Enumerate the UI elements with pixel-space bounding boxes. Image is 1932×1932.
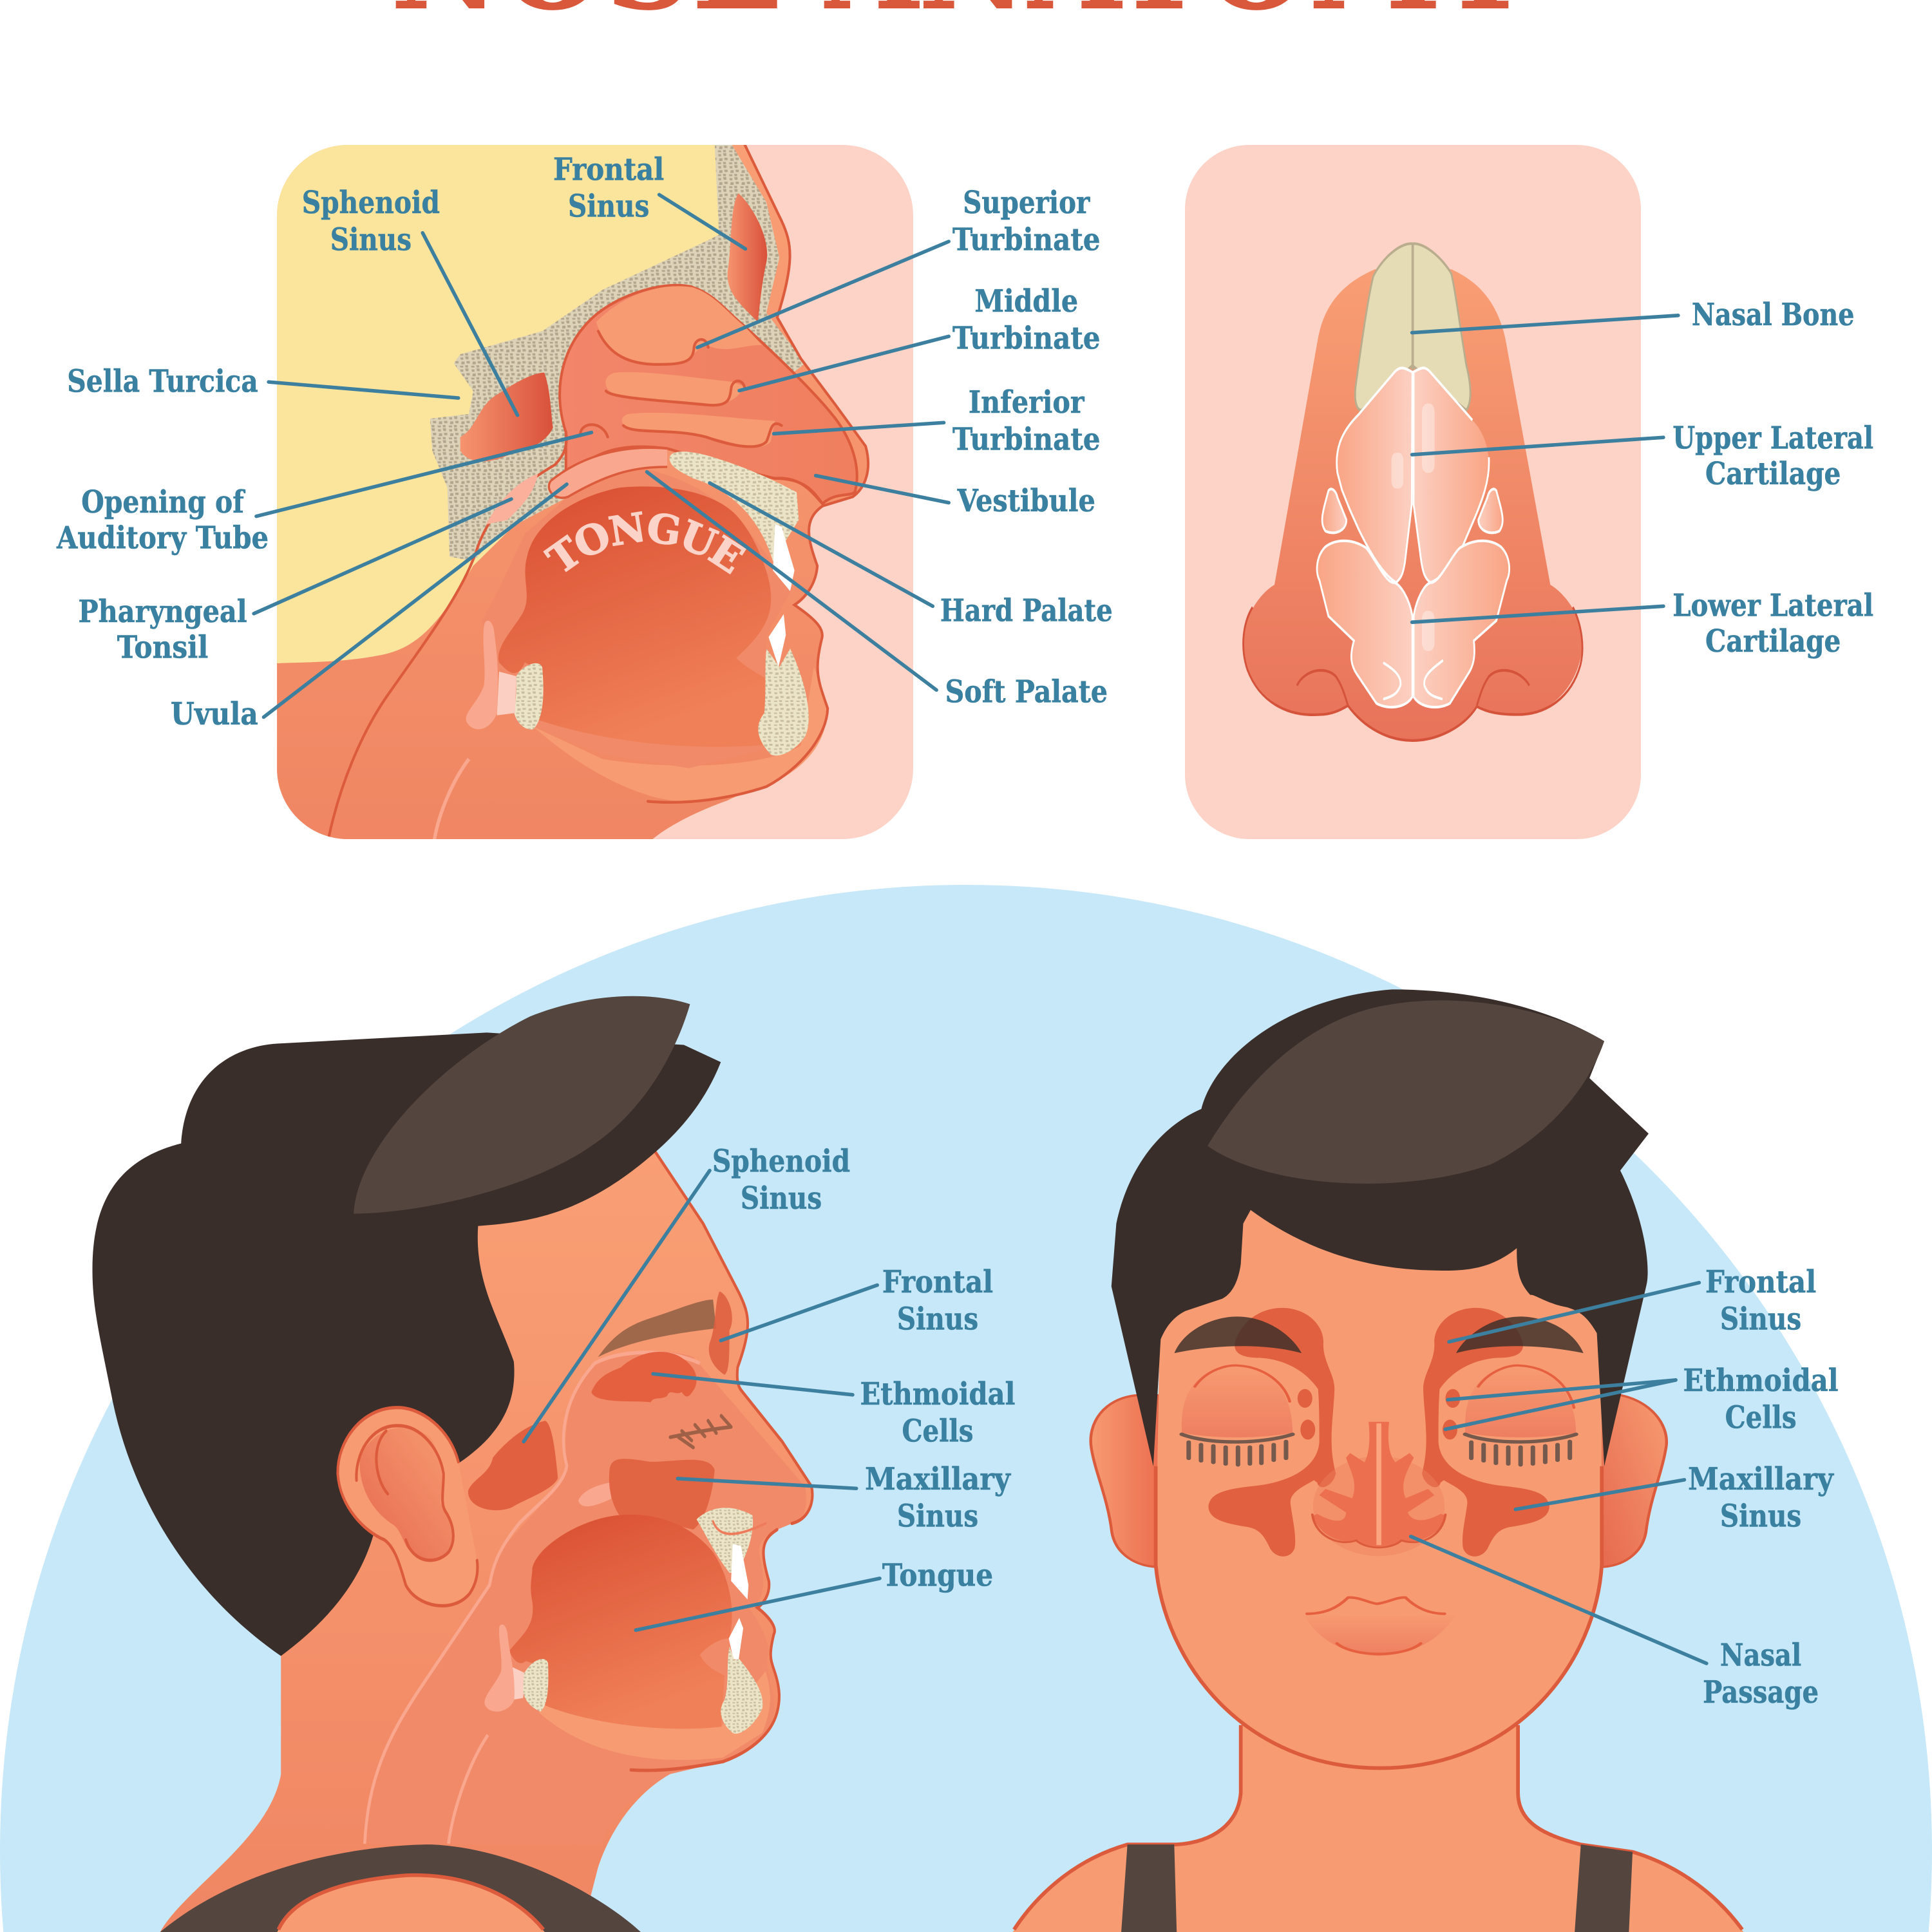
label: Inferior Turbinate: [774, 384, 1101, 457]
label: Ethmoidal Cells (side view): Cells: [902, 1414, 973, 1450]
label: Pharyngeal Tonsil: [78, 499, 511, 666]
chin outline: [1156, 1466, 1602, 1768]
label: Superior Turbinate: [697, 185, 1101, 348]
label: Middle Turbinate: [739, 283, 1101, 391]
eyelid arcs: [1195, 1365, 1574, 1408]
label: Sphenoid Sinus (side view): [524, 1144, 850, 1442]
hard palate: [669, 451, 799, 561]
face: [1156, 1208, 1602, 1768]
label: Opening of Auditory Tube: Auditory Tube: [56, 520, 269, 556]
right ear: [1601, 1396, 1667, 1567]
label: Middle Turbinate: Middle: [974, 283, 1078, 319]
label: Maxillary Sinus (front view): Maxillary: [1688, 1461, 1834, 1497]
labels and leader lines: [56, 151, 1873, 1710]
soft palate band: [578, 1482, 611, 1506]
lips: [1303, 1614, 1457, 1656]
illustration: front view of head: [1013, 989, 1743, 1932]
lip line: [713, 1521, 766, 1534]
eyelid left: [1182, 1365, 1293, 1437]
label: Vestibule: [816, 476, 1095, 519]
neck and shoulders: [1013, 1725, 1743, 1932]
neckline outline: [278, 1875, 544, 1929]
label: Soft Palate: Soft Palate: [945, 674, 1108, 710]
label: Tongue: [636, 1557, 993, 1630]
label: Maxillary Sinus (front view): Sinus: [1720, 1499, 1801, 1535]
label: Frontal Sinus (front view): Sinus: [1720, 1301, 1801, 1337]
label: Frontal Sinus (side view): [721, 1264, 993, 1341]
label: Inferior Turbinate: Turbinate: [952, 421, 1101, 457]
hard palate: [697, 1508, 753, 1573]
right sinus group: [1422, 1308, 1549, 1557]
ethmoidal cells: [591, 1352, 697, 1402]
label: Inferior Turbinate: Inferior: [969, 384, 1084, 421]
label: Maxillary Sinus (side view): Sinus: [897, 1499, 978, 1535]
teeth: [729, 1544, 748, 1660]
label: Maxillary Sinus (side view): [677, 1461, 1011, 1535]
face profile outline: [648, 145, 868, 802]
turbinate outlines: [580, 331, 822, 504]
lower lateral cartilage right: [1414, 541, 1510, 707]
tongue: [498, 486, 771, 747]
nose tip: [1313, 1456, 1444, 1556]
chin bone: [721, 1647, 762, 1734]
nasal passage: [1313, 1422, 1446, 1546]
brain background: [277, 145, 721, 663]
label: Sphenoid Sinus (section): [302, 185, 518, 415]
neckline skin: [277, 1875, 545, 1932]
hyoid link: [511, 1667, 526, 1700]
epiglottis: [466, 621, 498, 729]
lower lateral cartilage left: [1317, 541, 1412, 707]
oral area: [482, 469, 792, 768]
label: Opening of Auditory Tube: [56, 433, 591, 556]
inferior turbinate: [622, 413, 775, 447]
label: Pharyngeal Tonsil: Tonsil: [117, 630, 208, 666]
nasal bone: [1355, 243, 1470, 410]
label: Soft Palate: [647, 472, 1108, 710]
label: Lower Lateral Cartilage: Lower Lateral: [1672, 588, 1873, 624]
eyebrow: [598, 1300, 716, 1357]
hair highlight: [354, 996, 690, 1214]
label: Pharyngeal Tonsil: Pharyngeal: [78, 594, 247, 630]
bone suture: [1410, 245, 1416, 370]
pharyngeal tonsil: [486, 474, 538, 524]
label: Uvula: [171, 484, 567, 732]
label: Lower Lateral Cartilage: Cartilage: [1705, 623, 1841, 659]
accessory cartilage right: [1479, 489, 1502, 533]
label: Superior Turbinate: Turbinate: [952, 222, 1101, 258]
label: Frontal Sinus (section): [553, 151, 746, 249]
label: Frontal Sinus (front view): [1449, 1264, 1816, 1342]
label: Sphenoid Sinus (side view): Sinus: [741, 1180, 822, 1217]
neck line: [448, 1735, 488, 1844]
label: Hard Palate: Hard Palate: [940, 592, 1113, 629]
neck and face skin: [277, 145, 868, 840]
tongue: [509, 1515, 732, 1728]
label: Frontal Sinus (section): Sinus: [568, 189, 649, 225]
panel: front view of nasal cartilage: [1185, 145, 1641, 839]
label: Upper Lateral Cartilage: Upper Lateral: [1672, 420, 1873, 456]
label: Frontal Sinus (front view): Frontal: [1705, 1264, 1816, 1300]
label: Middle Turbinate: Turbinate: [952, 320, 1101, 356]
label: Tongue: Tongue: [882, 1557, 993, 1593]
shirt straps: [1121, 1844, 1633, 1932]
label: Frontal Sinus (section): Frontal: [553, 151, 664, 187]
label: Ethmoidal Cells (front view): [1445, 1363, 1839, 1435]
label: Sphenoid Sinus (section): Sinus: [330, 222, 412, 258]
eyebrows: [1174, 1316, 1584, 1353]
upper lateral cartilage right: [1413, 368, 1489, 583]
hair highlight: [1208, 1000, 1604, 1184]
jaw light band: [534, 667, 828, 801]
teeth: [768, 524, 795, 667]
soft palate outline: [549, 448, 667, 498]
frontal sinus: [728, 193, 767, 322]
curved label: tongue: TONGUE: [543, 511, 746, 574]
label: Superior Turbinate: Superior: [963, 185, 1090, 221]
superior turbinate: [596, 286, 762, 366]
nose outline: [1244, 607, 1582, 741]
label: Ethmoidal Cells (front view): Ethmoidal: [1683, 1363, 1839, 1399]
label: Vestibule: Vestibule: [957, 483, 1095, 519]
chin light area: [539, 1671, 770, 1760]
label: Sella Turcica: [67, 363, 459, 399]
ear lines: [356, 1426, 453, 1560]
shirt: [160, 1844, 641, 1932]
inner ear: [359, 1428, 453, 1560]
middle turbinate: [605, 372, 745, 405]
label: Nasal Passage: Passage: [1703, 1674, 1819, 1710]
face profile outline: [631, 1152, 812, 1770]
label: Sphenoid Sinus (section): Sphenoid: [302, 185, 440, 221]
epiglottis: [484, 1625, 515, 1712]
label: Sella Turcica: Sella Turcica: [67, 363, 258, 399]
interior outline: [365, 1352, 700, 1844]
lip lines: [1307, 1598, 1444, 1654]
jaw bone: [758, 649, 809, 755]
hair: [1112, 989, 1649, 1466]
nostril outline: [1312, 1515, 1445, 1548]
eyelashes: [670, 1416, 731, 1448]
label: Nasal Bone: Nasal Bone: [1692, 297, 1854, 333]
label: Lower Lateral Cartilage: [1412, 588, 1873, 659]
eyelashes: [1182, 1434, 1576, 1465]
label: Upper Lateral Cartilage: [1412, 420, 1873, 492]
left sinus group: [1208, 1308, 1336, 1557]
label: Ethmoidal Cells (side view): Ethmoidal: [860, 1376, 1016, 1412]
neck outline: [1014, 1725, 1742, 1929]
label: Nasal Bone: [1412, 297, 1854, 333]
upper lateral cartilage left: [1337, 368, 1412, 583]
neck line: [435, 759, 469, 840]
sphenoid sinus: [460, 373, 553, 462]
pharynx back wall: [328, 432, 567, 837]
label: Hard Palate: [710, 483, 1113, 629]
alar curls: [1384, 661, 1443, 699]
illustration: side view of head: [92, 996, 812, 1932]
label: Ethmoidal Cells (side view): [653, 1374, 1016, 1450]
sphenoid sinus: [468, 1421, 558, 1510]
right cartilage outline: [1413, 368, 1489, 583]
face interior: [365, 1351, 806, 1844]
external nose: [1243, 269, 1583, 741]
soft palate: [549, 448, 667, 498]
hair: [92, 1032, 721, 1656]
ear: [337, 1408, 478, 1605]
label: Sphenoid Sinus (side view): Sphenoid: [712, 1144, 850, 1180]
label: Nasal Passage: [1411, 1537, 1819, 1710]
label: Uvula: Uvula: [171, 696, 258, 732]
accessory cartilage left: [1322, 489, 1347, 533]
label: Maxillary Sinus (front view): [1515, 1461, 1834, 1535]
label: Frontal Sinus (side view): Sinus: [897, 1301, 978, 1337]
label: Nasal Passage: Nasal: [1720, 1638, 1801, 1674]
head and neck skin: [160, 1141, 812, 1932]
frontal sinus: [709, 1291, 732, 1375]
maxillary sinus: [609, 1459, 715, 1530]
highlights: [1392, 404, 1435, 651]
eyelid right: [1465, 1365, 1576, 1437]
bone: [430, 145, 805, 561]
panel: sagittal section of the nose: [277, 145, 913, 840]
label: Opening of Auditory Tube: Opening of: [81, 484, 246, 520]
hyoid bone: [523, 1659, 548, 1712]
label: Upper Lateral Cartilage: Cartilage: [1705, 456, 1841, 492]
septum: [1375, 1423, 1383, 1545]
nasal cavity: [560, 285, 857, 504]
label: Maxillary Sinus (side view): Maxillary: [865, 1461, 1011, 1497]
label: Ethmoidal Cells (front view): Cells: [1725, 1399, 1797, 1435]
label: Frontal Sinus (side view): Frontal: [882, 1264, 993, 1300]
blue circle background: [0, 885, 1932, 1932]
hyoid bone: [514, 663, 544, 730]
hyoid link: [497, 672, 516, 715]
left ear: [1091, 1396, 1159, 1567]
